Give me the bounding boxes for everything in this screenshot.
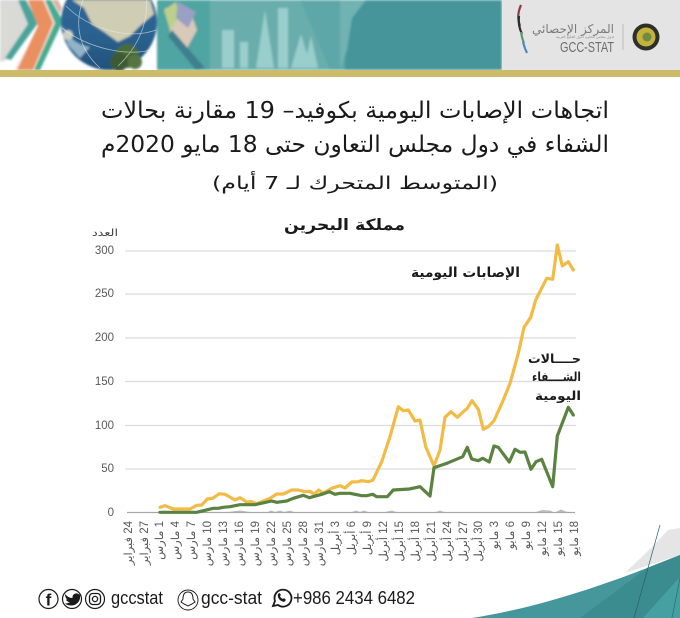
x axis date labels: 21 أبريل (423, 521, 439, 562)
x axis date labels (123, 520, 582, 566)
icon: whatsapp (273, 590, 291, 607)
y axis unit: العدد (92, 228, 118, 239)
x axis date labels: 3 مايو (489, 521, 502, 550)
y axis labels (95, 245, 114, 519)
x axis date labels: 4 مارس (170, 520, 183, 560)
y axis labels: 50 (101, 463, 114, 475)
x axis date labels: 9 مايو (521, 521, 534, 550)
x axis line (127, 512, 575, 514)
y axis labels: 300 (95, 245, 114, 257)
label: daily recoveries (528, 351, 581, 403)
x axis date labels: 13 مارس (218, 521, 231, 566)
x axis date labels: 19 مارس (250, 521, 263, 566)
y axis labels: 200 (95, 332, 114, 344)
logo: GCC-STAT (518, 5, 660, 56)
x axis date labels: 6 أبريل (343, 521, 359, 555)
x axis date labels: 18 مايو (569, 521, 582, 557)
x axis date labels: 6 مايو (505, 521, 518, 550)
title line 2: الشفاء في دول مجلس التعاون حتى 18 مايو 2020م (101, 132, 609, 158)
y axis labels: 150 (95, 376, 114, 388)
x axis date labels: 30 أبريل (470, 521, 486, 562)
handle: gcc-stat: gcc-stat (201, 588, 262, 608)
corner swoosh (472, 525, 680, 618)
chart: Bahrain daily cases and recoveries (92, 216, 582, 566)
icon: facebook (39, 590, 58, 610)
series: daily cases (160, 245, 573, 509)
x axis date labels: 16 مارس (234, 521, 247, 566)
x axis date labels: 12 أبريل (375, 521, 391, 562)
x axis date labels: 27 فبراير (139, 521, 152, 566)
x axis date labels: 7 مارس (186, 521, 199, 560)
label: daily recoveries: اليومية (535, 388, 581, 403)
x axis date labels: 18 أبريل (407, 521, 423, 562)
label: daily recoveries: الشــــفاء (532, 369, 581, 384)
subtitle: (المتوسط المتحرك لـ 7 أيام) (212, 171, 498, 194)
title line 1: اتجاهات الإصابات اليومية بكوفيد– 19 مقارنة بحالات (101, 98, 609, 124)
x axis date labels: 9 أبريل (359, 521, 375, 555)
logo: GCC-STAT: المركز الإحصائي (532, 22, 614, 37)
x axis date labels: 22 مارس (266, 521, 279, 566)
header banner (0, 0, 680, 71)
x axis date labels: 27 أبريل (455, 521, 471, 562)
x axis date labels: 12 مايو (537, 521, 550, 557)
handle: gccstat: gccstat (111, 588, 163, 608)
gold stripe (0, 70, 680, 77)
series: daily recoveries (160, 407, 573, 512)
icon: instagram (86, 590, 104, 608)
y axis labels: 100 (95, 420, 114, 432)
label: daily cases: الإصابات اليومية (411, 265, 520, 281)
x axis date labels: 10 مارس (202, 521, 215, 566)
x axis date labels: 15 مايو (553, 521, 566, 557)
chart title: مملكة البحرين (284, 216, 405, 234)
x axis date labels: 31 مارس (314, 521, 327, 566)
x axis date labels: 15 أبريل (391, 521, 407, 562)
globe (61, 0, 157, 71)
deaths series near baseline (228, 510, 567, 512)
icon: snapchat (178, 590, 198, 610)
y axis labels: 250 (95, 288, 114, 300)
phone number: +986 2434 6482 (293, 588, 415, 608)
y axis labels: 0 (108, 507, 114, 519)
footer: contact details (39, 588, 415, 610)
logo: GCC-STAT: GCC-STAT (560, 39, 614, 56)
x axis date labels: 1 مارس (154, 521, 167, 560)
icon: twitter (62, 590, 82, 608)
x axis date labels: 25 مارس (282, 521, 295, 566)
label: daily recoveries: حــــالات (528, 351, 581, 366)
icon: facebook: f (46, 590, 52, 610)
x axis date labels: 28 مارس (298, 521, 311, 566)
x axis date labels: 24 فبراير (123, 520, 136, 566)
x axis date labels: 24 أبريل (439, 520, 455, 562)
logo: GCC-STAT: لدول مجلس التعاون لدول الخليج العربية (556, 35, 614, 39)
x axis date labels: 3 أبريل (327, 521, 343, 555)
